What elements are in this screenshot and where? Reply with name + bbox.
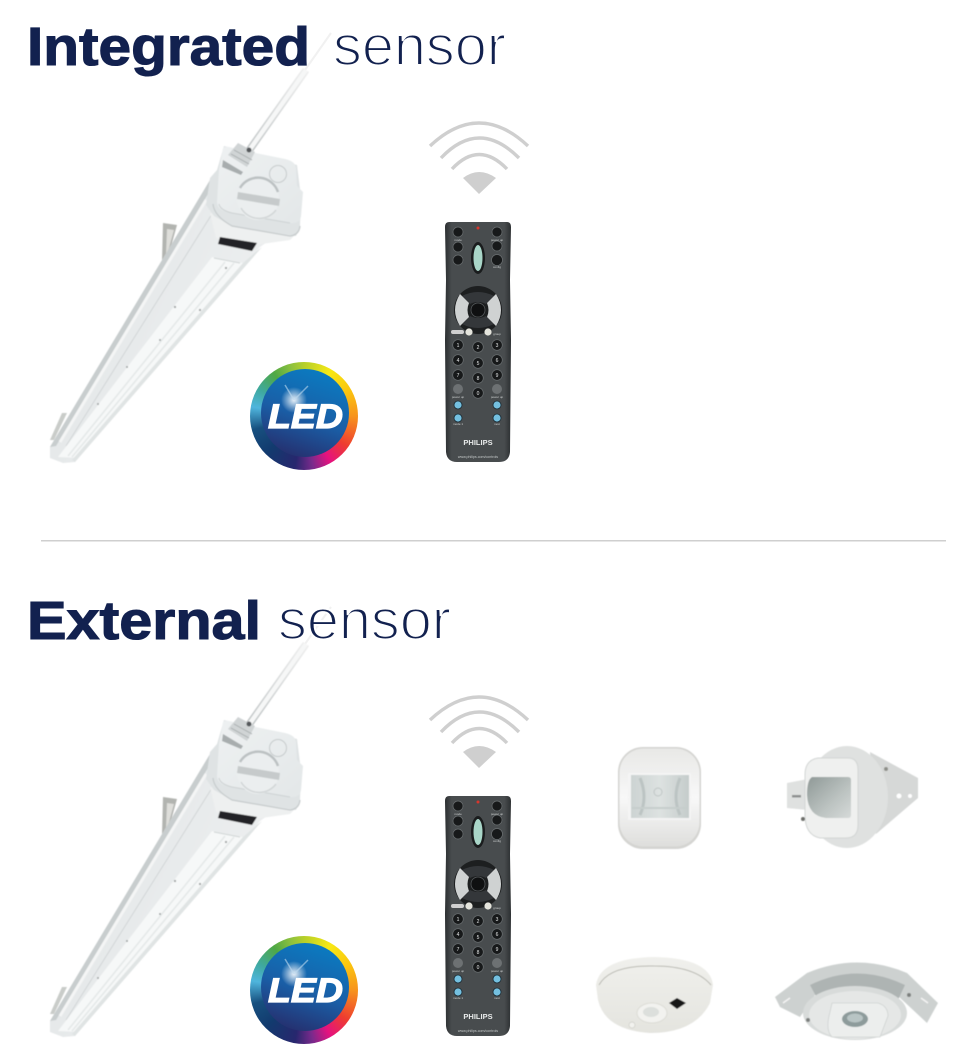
remote control, integrated section: mode [454,238,462,242]
remote control, external section: power up [491,812,504,816]
title: Integrated sensor: Integrated [27,17,310,77]
sensor: ceiling-mounted dome sensor [596,957,713,1033]
remote control, external section: power up [452,969,465,973]
remote control, integrated section: 8 [477,376,480,382]
title: Integrated sensor: sensor [333,14,506,78]
remote control, external section: 6 [496,932,499,938]
remote control, integrated section [445,222,511,462]
product photo: external sensor LED luminaire [50,644,306,1037]
title: Integrated sensor [27,14,506,78]
remote control, external section: mode 1 [453,996,463,1000]
remote control, external section: 9 [496,947,499,953]
LED badge, external section: LED [268,972,343,1010]
remote control, external section: 2 [477,919,480,925]
icon: wireless signal, external section [430,697,528,768]
remote control, external section: 5 [477,935,480,941]
remote control, integrated section: power up [491,238,504,242]
product photo: integrated sensor LED luminaire [50,70,306,463]
remote control, integrated section: www.philips.com/controls [458,455,498,459]
LED badge, external section [250,936,358,1044]
remote control, external section: 4 [457,932,460,938]
remote control, external section: www.philips.com/controls [458,1029,498,1033]
remote control, external section: PHILIPS [463,1012,493,1021]
remote control, external section: config [493,839,501,843]
remote control, integrated section: 9 [496,373,499,379]
title: External sensor: sensor [278,588,451,652]
LED badge, integrated section [250,362,358,470]
remote control, external section [445,796,511,1036]
remote control, external section: 7 [457,947,460,953]
remote control, integrated section: 2 [477,345,480,351]
remote control, integrated section: 0 [477,391,480,397]
remote control, external section: 8 [477,950,480,956]
remote control, external section: 3 [496,917,499,923]
remote control, external section: mode [454,812,462,816]
LED badge, integrated section: LED [268,398,343,436]
divider [41,540,946,542]
remote control, integrated section: next [494,422,500,426]
sensor: wall-mounted square motion sensor [618,747,701,849]
remote control, external section: 1 [457,917,460,923]
remote control, integrated section: 1 [457,343,460,349]
remote control, integrated section: 6 [496,358,499,364]
title: External sensor: External [27,591,261,651]
title: External sensor [27,588,451,652]
remote control, integrated section: group [493,332,501,336]
remote control, integrated section: 5 [477,361,480,367]
remote control, integrated section: 7 [457,373,460,379]
remote control, integrated section: mode 1 [453,422,463,426]
remote control, external section: group [493,906,501,910]
remote control, integrated section: power up [491,395,504,399]
remote control, external section: next [494,996,500,1000]
remote control, integrated section: power up [452,395,465,399]
remote control, external section: power up [491,969,504,973]
remote control, integrated section: PHILIPS [463,438,493,447]
sensor: outdoor motion sensor with bracket [787,746,918,848]
sensor: high-bay sensor with mounting bracket [775,962,938,1040]
remote control, integrated section: config [493,265,501,269]
remote control, external section: 0 [477,965,480,971]
remote control, integrated section: 3 [496,343,499,349]
remote control, integrated section: 4 [457,358,460,364]
icon: wireless signal, integrated section [430,123,528,194]
